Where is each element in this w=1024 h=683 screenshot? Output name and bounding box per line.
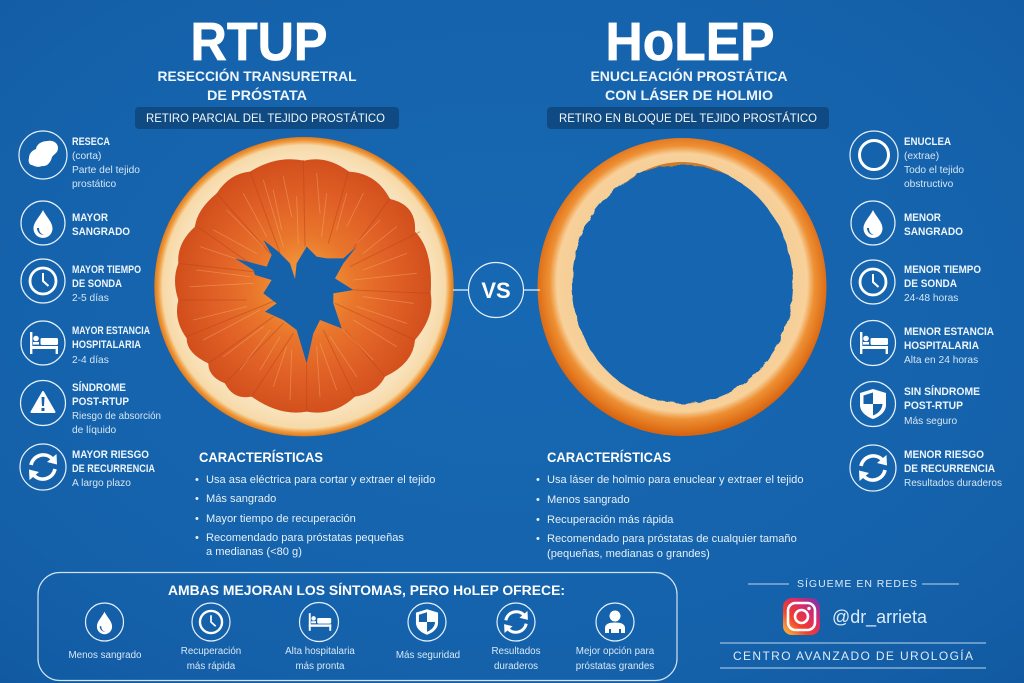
characteristics: HoLEP: •	[536, 494, 540, 506]
banner: retiro en bloque	[547, 107, 829, 129]
clinic name: CENTRO AVANZADO DE UROLOGÍA	[733, 648, 973, 663]
benefit: prostatas grandes	[576, 603, 655, 672]
benefit: alta hospitalaria: más pronta	[295, 661, 345, 672]
item: recurrencia: A largo plazo	[72, 478, 131, 489]
item: reseca: (corta)	[72, 151, 101, 162]
benefit: recuperacion: Recuperación	[181, 646, 241, 657]
benefit: resultados: duraderos	[494, 661, 538, 672]
item: estancia hospitalaria: MAYOR ESTANCIA	[72, 325, 150, 337]
benefit: menos sangrado	[69, 603, 142, 661]
benefit: seguridad: Más seguridad	[396, 650, 460, 661]
title: HoLEP: HoLEP	[606, 12, 774, 72]
item: sin sindrome: POST-RTUP	[904, 400, 963, 412]
item: recurrencia: MENOR RIESGO	[904, 449, 984, 461]
item: recurrencia: MAYOR RIESGO	[72, 449, 149, 461]
characteristics: RTUP: •	[195, 532, 199, 544]
benefit: recuperacion: más rápida	[187, 661, 236, 672]
item: tiempo de sonda	[851, 260, 981, 304]
orange: partial resection	[154, 137, 454, 436]
banner: retiro parcial: RETIRO PARCIAL DEL TEJIDO PROSTÁTICO	[146, 111, 385, 125]
clinic name	[720, 643, 986, 668]
item: sangrado: MENOR	[904, 212, 941, 224]
benefit: alta hospitalaria	[285, 602, 355, 672]
item: sindrome post-rtup: POST-RTUP	[72, 396, 129, 408]
item: enuclea: ENUCLEA	[904, 136, 951, 148]
item: recurrencia: DE RECURRENCIA	[72, 463, 155, 475]
item: estancia hospitalaria: HOSPITALARIA	[904, 340, 979, 352]
characteristics: HoLEP: Usa láser de holmio para enuclear y extraer el tejido	[547, 474, 804, 486]
benefit: prostatas grandes: próstatas grandes	[576, 661, 654, 672]
orange: peel ring	[538, 138, 826, 436]
item: reseca	[19, 131, 140, 190]
characteristics: RTUP: •	[195, 513, 199, 525]
item: sin sindrome: SIN SÍNDROME	[904, 385, 980, 398]
characteristics: RTUP: a medianas (<80 g)	[206, 546, 302, 558]
item: sin sindrome: Más seguro	[904, 416, 958, 427]
item: recurrencia: Resultados duraderos	[904, 478, 1002, 489]
item: recurrencia: DE RECURRENCIA	[904, 463, 995, 475]
right list: HoLEP outcomes	[850, 131, 1002, 491]
banner: retiro en bloque: RETIRO EN BLOQUE DEL TEJIDO PROSTÁTICO	[559, 111, 817, 125]
social handle: @dr_arrieta	[832, 606, 928, 628]
title: HoLEP	[590, 12, 788, 103]
item: sindrome post-rtup: SÍNDROME	[72, 381, 126, 394]
item: reseca: Parte del tejido	[72, 165, 140, 176]
item: enuclea: (extrae)	[904, 151, 939, 162]
item: sangrado: MAYOR	[72, 212, 108, 224]
characteristics: HoLEP: •	[536, 533, 540, 545]
item: sangrado: SANGRADO	[904, 226, 963, 238]
item: estancia hospitalaria: 2-4 días	[72, 355, 109, 366]
benefit: alta hospitalaria: Alta hospitalaria	[285, 646, 355, 657]
characteristics: RTUP: Usa asa eléctrica para cortar y extraer el tejido	[206, 474, 435, 486]
item: estancia hospitalaria: MENOR ESTANCIA	[904, 326, 994, 338]
item: estancia hospitalaria: Alta en 24 horas	[904, 355, 978, 366]
characteristics: RTUP: Más sangrado	[206, 493, 276, 505]
characteristics: RTUP	[195, 450, 435, 558]
item: sangrado: SANGRADO	[72, 226, 130, 238]
item: estancia hospitalaria	[21, 321, 150, 366]
item: sangrado	[21, 201, 130, 245]
characteristics: RTUP: •	[195, 493, 199, 505]
characteristics: HoLEP	[536, 450, 804, 560]
title: HoLEP: ENUCLEACIÓN PROSTÁTICA	[590, 67, 788, 84]
characteristics: HoLEP: •	[536, 474, 540, 486]
benefit: seguridad	[396, 603, 460, 661]
title: RTUP	[158, 12, 357, 103]
item: estancia hospitalaria: HOSPITALARIA	[72, 339, 141, 351]
item: reseca: RESECA	[72, 136, 110, 148]
title: HoLEP: CON LÁSER DE HOLMIO	[605, 87, 773, 103]
characteristics: HoLEP: CARACTERÍSTICAS	[547, 450, 671, 465]
benefit: recuperacion	[181, 603, 241, 672]
item: reseca: prostático	[72, 179, 117, 190]
vs badge: VS	[481, 278, 511, 303]
panel: summary benefits	[38, 572, 677, 680]
benefit: resultados: Resultados	[491, 646, 541, 657]
item: tiempo de sonda: DE SONDA	[904, 278, 957, 290]
banner: retiro parcial	[135, 107, 399, 129]
item: sindrome post-rtup: Riesgo de absorción	[72, 411, 161, 422]
item: tiempo de sonda: 2-5 días	[72, 293, 109, 304]
item: enuclea: Todo el tejido	[904, 165, 964, 176]
item: tiempo de sonda: MENOR TIEMPO	[904, 264, 981, 276]
item: sindrome post-rtup: de líquido	[72, 425, 117, 436]
title: RTUP: RESECCIÓN TRANSURETRAL	[158, 67, 357, 84]
item: tiempo de sonda: 24-48 horas	[904, 293, 958, 304]
item: sangrado	[851, 201, 963, 245]
vs badge	[453, 262, 540, 318]
item: enuclea	[850, 131, 964, 190]
item: recurrencia	[850, 445, 1002, 491]
characteristics: HoLEP: Recomendado para próstatas de cualquier tamaño	[547, 533, 797, 545]
item: sin sindrome	[850, 382, 980, 427]
characteristics: HoLEP: Recuperación más rápida	[547, 514, 674, 526]
benefit: prostatas grandes: Mejor opción para	[576, 646, 655, 657]
title: RTUP: RTUP	[190, 12, 328, 72]
benefit: menos sangrado: Menos sangrado	[69, 650, 142, 661]
characteristics: HoLEP: •	[536, 514, 540, 526]
item: tiempo de sonda: MAYOR TIEMPO	[72, 264, 141, 276]
characteristics: RTUP: Recomendado para próstatas pequeñas	[206, 532, 404, 544]
left list: RTUP outcomes	[19, 131, 161, 490]
icon: instagram	[783, 598, 820, 635]
characteristics: HoLEP: Menos sangrado	[547, 494, 630, 506]
characteristics: RTUP: Mayor tiempo de recuperación	[206, 513, 356, 525]
panel heading: AMBAS MEJORAN LOS SÍNTOMAS, PERO HoLEP OFRECE:	[168, 582, 565, 599]
item: estancia hospitalaria	[850, 320, 994, 366]
benefit: resultados	[491, 603, 541, 672]
characteristics: RTUP: CARACTERÍSTICAS	[199, 450, 323, 465]
social heading: SÍGUEME EN REDES	[797, 577, 917, 590]
item: enuclea: obstructivo	[904, 179, 954, 190]
title: RTUP: DE PRÓSTATA	[207, 86, 307, 103]
characteristics: HoLEP: (pequeñas, medianas o grandes)	[547, 548, 710, 560]
item: sindrome post-rtup	[20, 380, 161, 436]
item: tiempo de sonda: DE SONDA	[72, 278, 122, 290]
item: tiempo de sonda	[21, 259, 141, 304]
item: recurrencia	[20, 444, 155, 490]
characteristics: RTUP: •	[195, 474, 199, 486]
